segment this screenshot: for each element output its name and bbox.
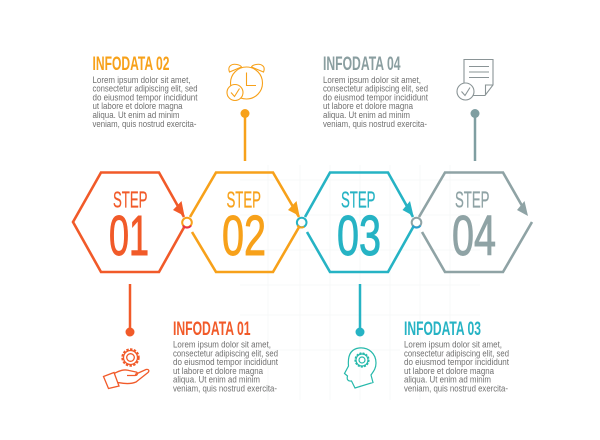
icon: head with gear xyxy=(344,348,376,388)
number 02: 02 xyxy=(222,204,266,268)
text block: infodata 03: INFODATA 03 xyxy=(404,318,481,340)
body text 02: ut labore et dolore magna xyxy=(92,101,183,111)
body text 04: veniam, quis nostrud exercita- xyxy=(323,119,427,129)
text block: infodata 01 xyxy=(173,318,279,394)
body text 03 xyxy=(404,340,510,394)
body text 02: veniam, quis nostrud exercita- xyxy=(92,119,197,129)
body text 03: consectetur adipiscing elit, sed xyxy=(404,348,509,358)
body text 02: aliqua. Ut enim ad minim xyxy=(92,110,180,120)
body text 01: Lorem ipsum dolor sit amet, xyxy=(173,340,271,350)
number 04: 04 xyxy=(452,204,496,268)
stem step 1 xyxy=(126,284,134,336)
number 01: 01 xyxy=(109,204,149,268)
body text 01: veniam, quis nostrud exercita- xyxy=(173,384,277,394)
body text 03: do eiusmod tempor incididunt xyxy=(404,357,510,367)
body text 03: veniam, quis nostrud exercita- xyxy=(404,384,508,394)
arrowhead step 3 xyxy=(402,201,414,216)
text block: infodata 02: INFODATA 02 xyxy=(92,53,170,75)
body text 04: do eiusmod tempor incididunt xyxy=(323,92,429,102)
text block: infodata 04 xyxy=(323,53,429,129)
stem step 3 xyxy=(356,284,364,336)
body text 01: ut labore et dolore magna xyxy=(173,366,263,376)
body text 04 xyxy=(323,75,429,129)
body text 02 xyxy=(92,75,198,129)
icon: alarm clock with check xyxy=(227,64,264,100)
stem step 2 xyxy=(240,109,250,161)
arrowhead step 1 xyxy=(173,201,184,216)
body text 03: ut labore et dolore magna xyxy=(404,366,494,376)
icon: document with check xyxy=(457,60,493,100)
hexagon step 4 xyxy=(419,172,532,272)
label step 1: STEP xyxy=(113,186,148,212)
body text 01 xyxy=(173,340,279,394)
text block: infodata 02 xyxy=(92,53,198,129)
hexagon step 1 xyxy=(73,172,187,272)
label step 4: STEP xyxy=(455,186,490,212)
body text 02: Lorem ipsum dolor sit amet, xyxy=(92,75,190,85)
stem step 4 xyxy=(470,109,480,161)
label step 3: STEP xyxy=(341,186,376,212)
body text 03: aliqua. Ut enim ad minim xyxy=(404,375,491,385)
hexagon step 3 xyxy=(305,172,416,272)
connector circle 2-3 xyxy=(297,218,307,228)
arrowhead step 2 xyxy=(288,201,300,216)
body text 04: Lorem ipsum dolor sit amet, xyxy=(323,75,421,85)
label step 2: STEP xyxy=(226,186,261,212)
body text 03: Lorem ipsum dolor sit amet, xyxy=(404,340,502,350)
text block: infodata 01: INFODATA 01 xyxy=(173,318,251,340)
body text 01: consectetur adipiscing elit, sed xyxy=(173,348,278,358)
text block: infodata 04: INFODATA 04 xyxy=(323,53,401,75)
body text 04: ut labore et dolore magna xyxy=(323,101,413,111)
icon: hand holding gear xyxy=(104,350,149,388)
text block: infodata 03 xyxy=(404,318,510,394)
connector circle 3-4 xyxy=(412,218,421,228)
number 03: 03 xyxy=(337,204,381,268)
body text 02: do eiusmod tempor incididunt xyxy=(92,92,198,102)
body text 01: do eiusmod tempor incididunt xyxy=(173,357,279,367)
hexagon step 2 xyxy=(190,172,302,272)
body text 04: consectetur adipiscing elit, sed xyxy=(323,84,428,94)
connector circle 1-2 xyxy=(182,218,192,228)
body text 02: consectetur adipiscing elit, sed xyxy=(92,84,198,94)
body text 04: aliqua. Ut enim ad minim xyxy=(323,110,410,120)
arrowhead step 4 xyxy=(517,201,528,216)
body text 01: aliqua. Ut enim ad minim xyxy=(173,375,260,385)
